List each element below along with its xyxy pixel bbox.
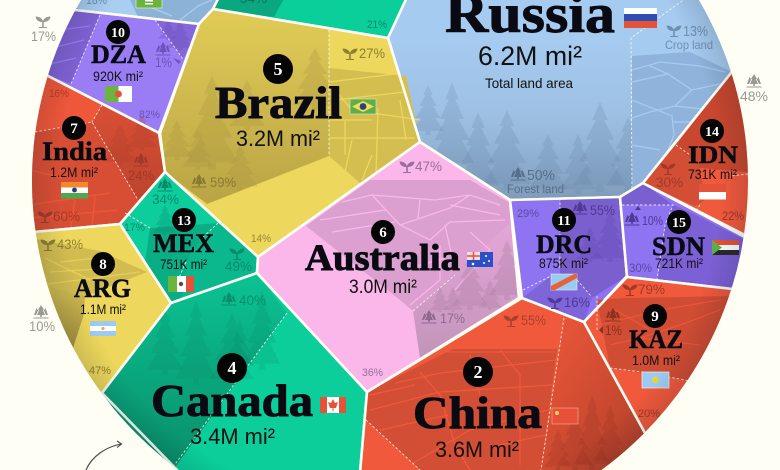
icon and label: crop 79% <box>622 281 665 297</box>
value: Australia: 3.0M mi² <box>349 277 417 298</box>
country name: DRC: DRC <box>536 230 592 259</box>
label: 20%: 20% <box>638 408 660 420</box>
panel: Mexico <box>120 172 258 303</box>
flag: Mexico <box>168 276 194 292</box>
rank badge: 9 <box>643 304 667 328</box>
rank badge: 8: 8 <box>99 257 107 273</box>
panel: Indonesia <box>642 72 768 234</box>
country name: DZA: DZA <box>91 40 146 69</box>
panel: Russia <box>388 0 760 200</box>
label: 21%: 21% <box>367 19 387 31</box>
icon and label: crop 79%: 79% <box>638 281 665 297</box>
panel: Kazakhstan <box>583 276 732 434</box>
rank badge: 9: 9 <box>651 309 659 325</box>
panel: Canada <box>102 273 367 470</box>
flag: Canada <box>320 397 346 413</box>
icon and label: forest 48% outside <box>740 74 768 104</box>
trees: Russia <box>416 83 632 189</box>
icon and label: forest 55%: 55% <box>590 202 615 218</box>
panel: DRC <box>510 197 628 322</box>
label: 17%: 17% <box>124 222 145 234</box>
panel: Brazil <box>160 9 420 257</box>
flag: China <box>552 408 578 424</box>
rank badge: 6 <box>371 220 395 244</box>
icon and label: crop 55% <box>504 312 546 328</box>
country name: Australia: Australia <box>305 238 460 279</box>
rank badge: 7: 7 <box>70 121 78 137</box>
label: 16%: 16% <box>49 88 69 100</box>
flag: Russia <box>624 8 657 28</box>
panel: Australia <box>257 142 525 392</box>
value: KAZ: 1.0M mi² <box>632 353 680 368</box>
rank badge: 6: 6 <box>379 225 387 241</box>
value: DZA: 920K mi² <box>93 68 143 84</box>
icon and label: crop 60%: 60% <box>53 208 80 224</box>
value: ARG: 1.1M mi² <box>80 302 126 317</box>
icon and label: crop 27% <box>342 45 385 61</box>
crop land <box>632 52 732 192</box>
country name: MEX: MEX <box>153 229 214 258</box>
label: 30%: 30% <box>629 261 652 275</box>
icon and label: forest 1%: 1% <box>605 323 622 338</box>
rank badge: 14: 14 <box>705 125 719 140</box>
flag: top-left cell <box>136 0 162 8</box>
country name: ARG: ARG <box>74 274 131 303</box>
icon and label: crop 55%: 55% <box>521 312 546 328</box>
flag: DRC <box>551 274 577 290</box>
icon and label: forest 1% <box>599 308 622 338</box>
country name: Canada: Canada <box>151 376 313 426</box>
value: Russia: 6.2M mi² <box>478 41 582 71</box>
rank badge: 4: 4 <box>228 358 236 378</box>
icon and label: forest 40%: 40% <box>239 292 266 308</box>
icon and label: forest 1% <box>155 42 181 70</box>
label: 50% forest land: 50% <box>527 168 555 184</box>
arrow <box>86 441 122 470</box>
icon and label: crop 30% <box>656 164 683 190</box>
icon and label: forest 10% outside <box>29 305 55 334</box>
rank badge: 2 <box>463 357 493 387</box>
label: 22%: 22% <box>722 209 744 223</box>
flag: India <box>61 182 88 198</box>
country name: India: India <box>42 137 107 166</box>
icon and label: forest 24% <box>128 153 154 183</box>
panel: top green cell <box>213 0 412 38</box>
icon and label: crop 47%: 47% <box>415 158 442 174</box>
country name: IDN: IDN <box>688 142 738 169</box>
label: 50% forest land: Forest land <box>507 182 564 196</box>
icon and label: forest 48% outside: 48% <box>740 88 768 104</box>
label: 82%: 82% <box>139 109 160 121</box>
icon and label: forest 59%: 59% <box>210 174 236 190</box>
panel: China <box>360 298 660 470</box>
rank badge: 10 <box>106 20 130 44</box>
flag: Argentina <box>90 321 116 336</box>
country name: SDN: SDN <box>652 232 705 261</box>
value: China: 3.6M mi² <box>435 437 519 462</box>
rank badge: 2: 2 <box>474 362 482 382</box>
panel: top-left cell <box>76 0 216 22</box>
rank badge: 5 <box>263 54 293 84</box>
flag: Algeria <box>105 86 132 102</box>
icon and label: crop 49%: 49% <box>225 258 252 274</box>
panel: Argentina <box>30 222 172 393</box>
panel: Algeria <box>32 8 198 131</box>
rank badge: 4 <box>217 353 247 383</box>
rank badge: 15: 15 <box>672 216 686 231</box>
icon and label: crop 27%: 27% <box>359 45 385 61</box>
icon and label: forest 24%: 24% <box>128 167 154 183</box>
forest land <box>409 88 632 199</box>
icon and label: forest 17% <box>422 310 465 326</box>
label: 14%: 14% <box>251 233 271 245</box>
icon: crop land sprout <box>666 26 682 37</box>
icon and label: crop 47% <box>400 158 442 174</box>
icon and label: crop 43% <box>40 236 83 252</box>
value: SDN: 721K mi² <box>655 256 703 271</box>
rank badge: 7 <box>62 116 86 140</box>
label: 47%: 47% <box>89 365 111 377</box>
country name: Brazil: Brazil <box>215 78 342 128</box>
rank badge: 13: 13 <box>177 214 191 229</box>
label: 13% crop land <box>665 24 713 52</box>
icon and label: crop 30%: 30% <box>656 174 683 190</box>
icon and label: forest 59% <box>192 174 236 190</box>
icon and label: forest 10% outside: 10% <box>29 318 55 334</box>
icon and label: forest 1%: 1% <box>155 55 172 70</box>
icon: forest land <box>510 167 526 180</box>
label: 13% crop land: 13% <box>683 24 708 40</box>
country name: China: China <box>413 388 542 438</box>
panel: India <box>32 74 164 230</box>
flag: Brazil <box>350 99 376 114</box>
flag: Indonesia <box>699 184 726 200</box>
label: 17% crop land: 17% <box>31 28 56 44</box>
icon and label: forest 34%: 34% <box>152 191 179 207</box>
label: 36%: 36% <box>362 367 383 379</box>
rank badge: 14 <box>700 119 724 143</box>
flag: Sudan <box>712 240 739 255</box>
label: 50% forest land <box>507 168 564 196</box>
icon and label: crop 60% <box>38 208 80 224</box>
dashed divider: Russia <box>631 0 686 195</box>
country name: KAZ: KAZ <box>629 325 683 354</box>
caption: total land area: Total land area <box>485 75 573 91</box>
value: IDN: 731K mi² <box>688 167 737 182</box>
value: MEX: 751K mi² <box>160 257 207 272</box>
label: 29%: 29% <box>517 208 539 220</box>
value: Canada: 3.4M mi² <box>190 424 275 449</box>
field lines: Russia <box>632 62 725 150</box>
rank badge: 5: 5 <box>274 59 282 79</box>
label: 13% crop land: Crop land <box>665 38 713 52</box>
label: 17% crop land <box>31 16 56 44</box>
icon and label: crop 16%: 16% <box>564 294 590 310</box>
value: India: 1.2M mi² <box>50 165 98 180</box>
rank badge: 8 <box>91 252 115 276</box>
region: Russia total <box>390 0 731 188</box>
value: Brazil: 3.2M mi² <box>236 126 320 151</box>
flag: Kazakhstan <box>642 372 669 388</box>
icon and label: forest 17%: 17% <box>440 310 465 326</box>
rank badge: 10: 10 <box>111 26 125 41</box>
value: DRC: 875K mi² <box>539 256 588 271</box>
flag: Australia <box>467 252 493 267</box>
rank badge: 11: 11 <box>557 214 571 229</box>
panel: Sudan <box>620 183 760 289</box>
icon and label: forest 10%: 10% <box>642 214 663 228</box>
icon and label: forest 40% <box>222 292 266 308</box>
icon and label: crop 43%: 43% <box>57 236 83 252</box>
